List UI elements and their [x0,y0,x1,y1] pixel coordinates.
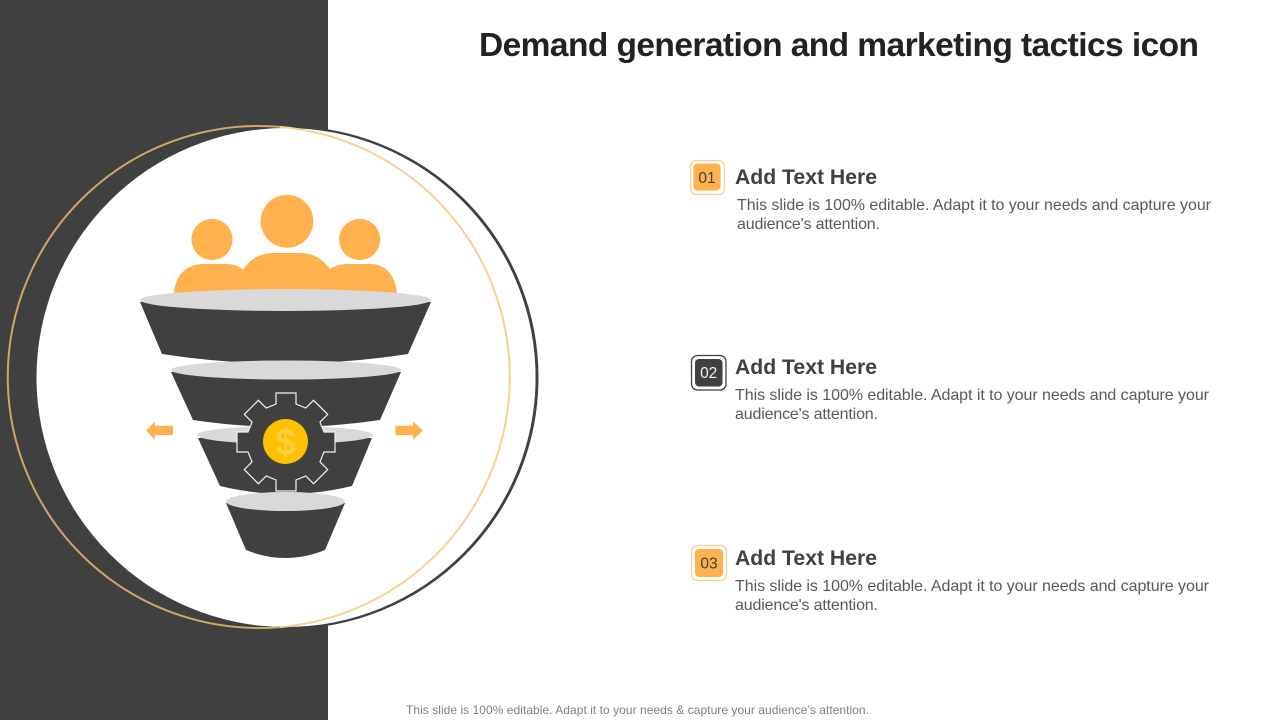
heading 03: Add Text Here [735,547,877,570]
badge 01 [690,160,724,194]
panel: dark left band [0,0,328,720]
description 02: This slide is 100% editable. Adapt it to your needs and capture your [735,387,1210,404]
description 03: audience's attention. [735,597,878,614]
icon: gear with dollar coin: $ [275,422,296,462]
badge 02 [692,356,726,390]
heading 01: Add Text Here [735,166,877,189]
funnel tier 1 [140,289,431,364]
badge 03: 03 [700,556,718,572]
description 01: audience's attention. [737,216,880,233]
item 02 [692,356,1210,423]
description 02: audience's attention. [735,406,878,423]
icon: audience of three people [174,195,397,296]
arrow: left [146,422,173,440]
white circle with dark outline [36,128,537,628]
funnel tier 2 [171,360,401,427]
footer note: This slide is 100% editable. Adapt it to your needs & capture your audience’s attention. [406,703,869,717]
description 01: This slide is 100% editable. Adapt it to your needs and capture your [737,197,1212,214]
icon: gear with dollar coin [237,393,335,491]
badge 02: 02 [700,365,717,382]
badge 03 [692,546,726,580]
item 01 [690,160,1212,233]
funnel tier 3 [197,426,373,494]
arrow: right [396,422,423,440]
funnel tier 4 [226,492,345,558]
item 03 [692,546,1210,614]
heading 02: Add Text Here [735,356,877,379]
gold ring [8,126,510,628]
badge 01: 01 [698,170,716,187]
description 03: This slide is 100% editable. Adapt it to your needs and capture your [735,578,1210,595]
title: Demand generation and marketing tactics icon [479,27,1199,64]
